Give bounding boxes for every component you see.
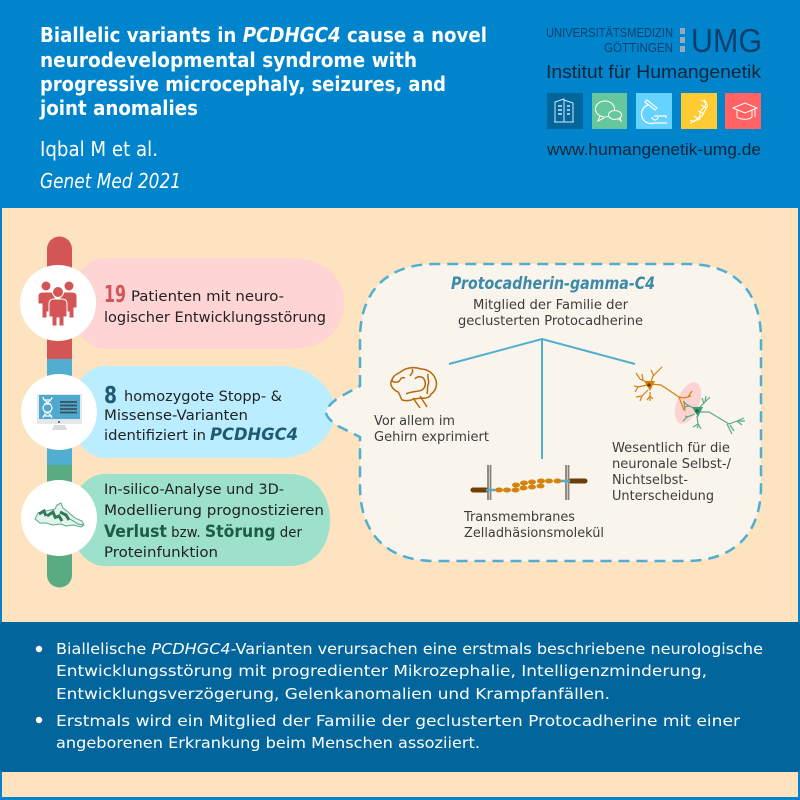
callout subtitle: Mitglied der Familie der bbox=[473, 297, 628, 313]
title: neurodevelopmental syndrome with bbox=[40, 48, 417, 72]
callout heading: Protocadherin-gamma-C4 bbox=[451, 274, 655, 294]
icon: speech bubbles bbox=[592, 93, 627, 129]
text: neuronal self recognition: Unterscheidung bbox=[612, 488, 714, 504]
panel: summary bbox=[0, 622, 800, 797]
text: neuronal self recognition: Wesentlich für die bbox=[612, 440, 730, 456]
stat: 19 patients: 19 bbox=[104, 282, 126, 308]
logo: UMG: GÖTTINGEN bbox=[604, 41, 673, 55]
panel: variants: Missense-Varianten bbox=[104, 408, 248, 424]
text: transmembrane: Zelladhäsionsmolekül bbox=[464, 525, 604, 541]
institute name: Institut für Humangenetik bbox=[546, 62, 762, 82]
text: brain expression bbox=[374, 413, 489, 445]
icon: graduation cap bbox=[725, 93, 761, 129]
title: Biallelic variants in PCDHGC4 cause a novel bbox=[40, 23, 487, 47]
text: neuronal self recognition: neuronale Selbst-/ bbox=[612, 456, 731, 472]
callout subtitle bbox=[458, 297, 643, 329]
title: joint anomalies bbox=[39, 96, 198, 120]
panel: analysis: Proteinfunktion bbox=[104, 545, 218, 561]
text: neuronal self recognition: Nichtselbst- bbox=[612, 472, 688, 488]
connector lines bbox=[449, 339, 635, 459]
bullet: second finding: Erstmals wird ein Mitglied der Familie der geclusterten Protocadherine mit einer bbox=[56, 712, 741, 730]
icon: protein model bbox=[21, 480, 97, 556]
icon: computer with DNA bbox=[21, 374, 97, 450]
callout subtitle: geclusterten Protocadherine bbox=[458, 313, 643, 329]
panel: analysis: Modellierung prognostizieren bbox=[104, 503, 324, 519]
bullet: second finding: angeborenen Erkrankung beim Menschen assoziiert. bbox=[56, 734, 480, 752]
panel: variants: PCDHGC4 bbox=[210, 425, 298, 445]
panel: patients bbox=[70, 258, 344, 349]
panel: patients: Patienten mit neuro- bbox=[131, 289, 284, 305]
text: neuronal self recognition bbox=[612, 440, 731, 504]
timeline bar bbox=[47, 237, 72, 587]
panel: main background bbox=[2, 208, 798, 622]
text: transmembrane bbox=[463, 509, 604, 541]
panel: variants: homozygote Stopp- & bbox=[124, 389, 282, 405]
website: www.humangenetik-umg.de bbox=[546, 141, 761, 159]
panel: analysis: Verlust bzw. Störung der bbox=[104, 522, 302, 542]
icon: neurons bbox=[634, 367, 745, 434]
logo: UMG: UNIVERSITÄTSMEDIZIN bbox=[546, 26, 673, 40]
icon: transmembrane molecule bbox=[473, 465, 585, 500]
panel: Protocadherin callout bbox=[326, 264, 761, 561]
icon: group of people bbox=[20, 265, 96, 341]
text: transmembrane: Transmembranes bbox=[463, 509, 575, 525]
panel: analysis bbox=[70, 474, 330, 566]
bullet: first finding: Entwicklungsverzögerung, Gelenkanomalien und Krampfanfällen. bbox=[56, 685, 610, 703]
panel: variants bbox=[70, 366, 335, 458]
logo: UMG bbox=[546, 22, 762, 59]
bullet: second finding bbox=[36, 712, 741, 752]
panel: analysis: In-silico-Analyse und 3D- bbox=[104, 482, 284, 498]
journal: Genet Med 2021 bbox=[40, 169, 181, 193]
text: brain expression: Gehirn exprimiert bbox=[374, 429, 489, 445]
stat: 8 variants: 8 bbox=[104, 383, 117, 409]
authors: Iqbal M et al. bbox=[40, 137, 158, 161]
panel: variants: identifiziert in bbox=[104, 428, 206, 444]
icon: DNA bbox=[681, 93, 717, 129]
text: brain expression: Vor allem im bbox=[374, 413, 455, 429]
icon: brain bbox=[391, 368, 436, 408]
icon: microscope bbox=[636, 93, 672, 129]
logo: UMG: UMG bbox=[691, 22, 762, 59]
bullet: first finding: Entwicklungsstörung mit progredienter Mikrozephalie, Intelligenzminderung, bbox=[56, 662, 707, 680]
title bbox=[39, 23, 487, 120]
title: progressive microcephaly, seizures, and bbox=[40, 72, 446, 96]
panel: header bbox=[0, 0, 800, 208]
panel: patients: logischer Entwicklungsstörung bbox=[104, 310, 326, 326]
bullet: first finding bbox=[36, 640, 763, 703]
icon: building bbox=[547, 93, 583, 129]
bullet: first finding: Biallelische PCDHGC4-Varianten verursachen eine erstmals beschriebene neurologische bbox=[56, 640, 763, 658]
